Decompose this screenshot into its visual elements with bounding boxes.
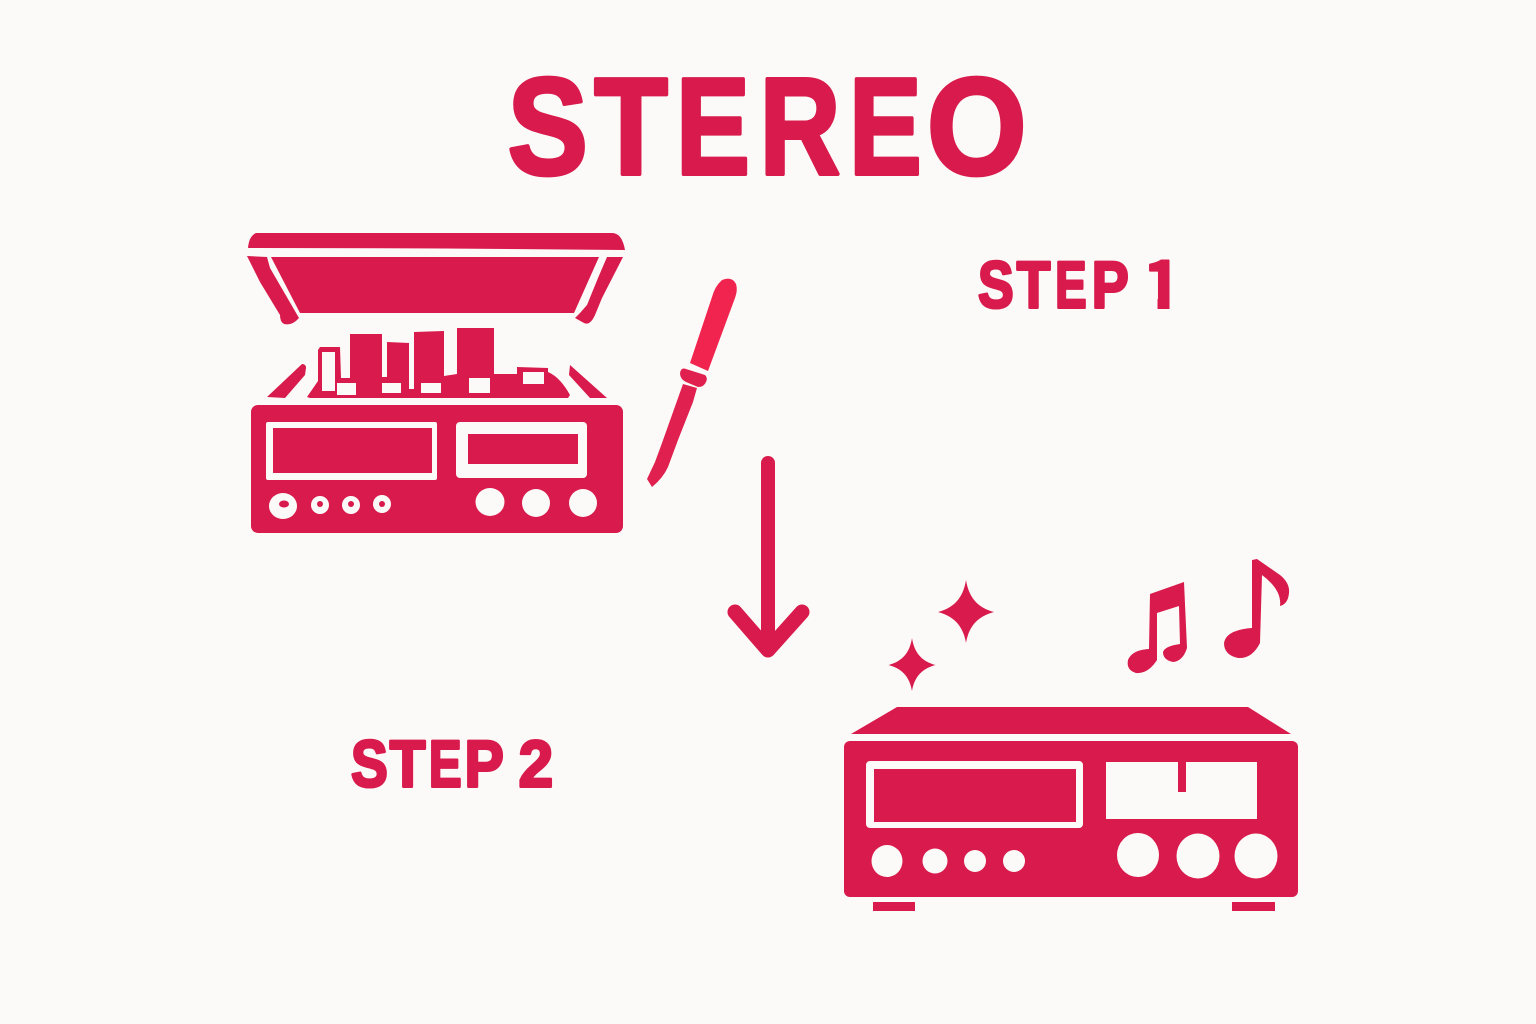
step 1 label: P (1092, 248, 1129, 322)
right inner strut (569, 365, 607, 398)
title: R (760, 49, 840, 204)
step 2 label: 2 (519, 727, 553, 801)
icon: finished stereo (844, 707, 1298, 911)
step 1 label: T (1017, 248, 1050, 322)
icon: sparkles (888, 580, 994, 691)
title: O (927, 50, 1027, 204)
feet (873, 902, 915, 911)
lid panel (271, 257, 599, 313)
lid top bar (248, 233, 625, 250)
stereo body (251, 405, 623, 533)
step 1 label: 1 (1143, 232, 1182, 328)
step 2 label: T (390, 728, 425, 801)
knobs (872, 833, 1278, 878)
title (508, 49, 1027, 204)
icon: open stereo with internals (247, 233, 625, 533)
display frames (266, 422, 587, 480)
arrow: down (735, 463, 802, 650)
display frame (866, 761, 1083, 828)
stereo body (844, 741, 1298, 897)
title: E (676, 49, 750, 204)
top lid (851, 707, 1291, 734)
left inner strut (267, 364, 306, 398)
icon: music notes (1128, 559, 1289, 673)
step 1 label: E (1055, 249, 1087, 322)
icon: screwdriver (647, 279, 737, 487)
left hinge arm (247, 256, 299, 324)
step 2 label (351, 727, 553, 801)
step 2 label: S (351, 727, 388, 801)
step 1 label: S (978, 248, 1014, 322)
title: S (508, 50, 588, 204)
knobs (269, 488, 597, 519)
white display (1106, 762, 1257, 819)
right hinge arm (575, 257, 623, 324)
step 2 label: P (464, 727, 504, 801)
step 2 label: E (429, 727, 462, 801)
title: E (849, 50, 922, 204)
exposed components (307, 328, 570, 398)
title: T (594, 50, 668, 204)
step 1 label (978, 260, 1170, 310)
